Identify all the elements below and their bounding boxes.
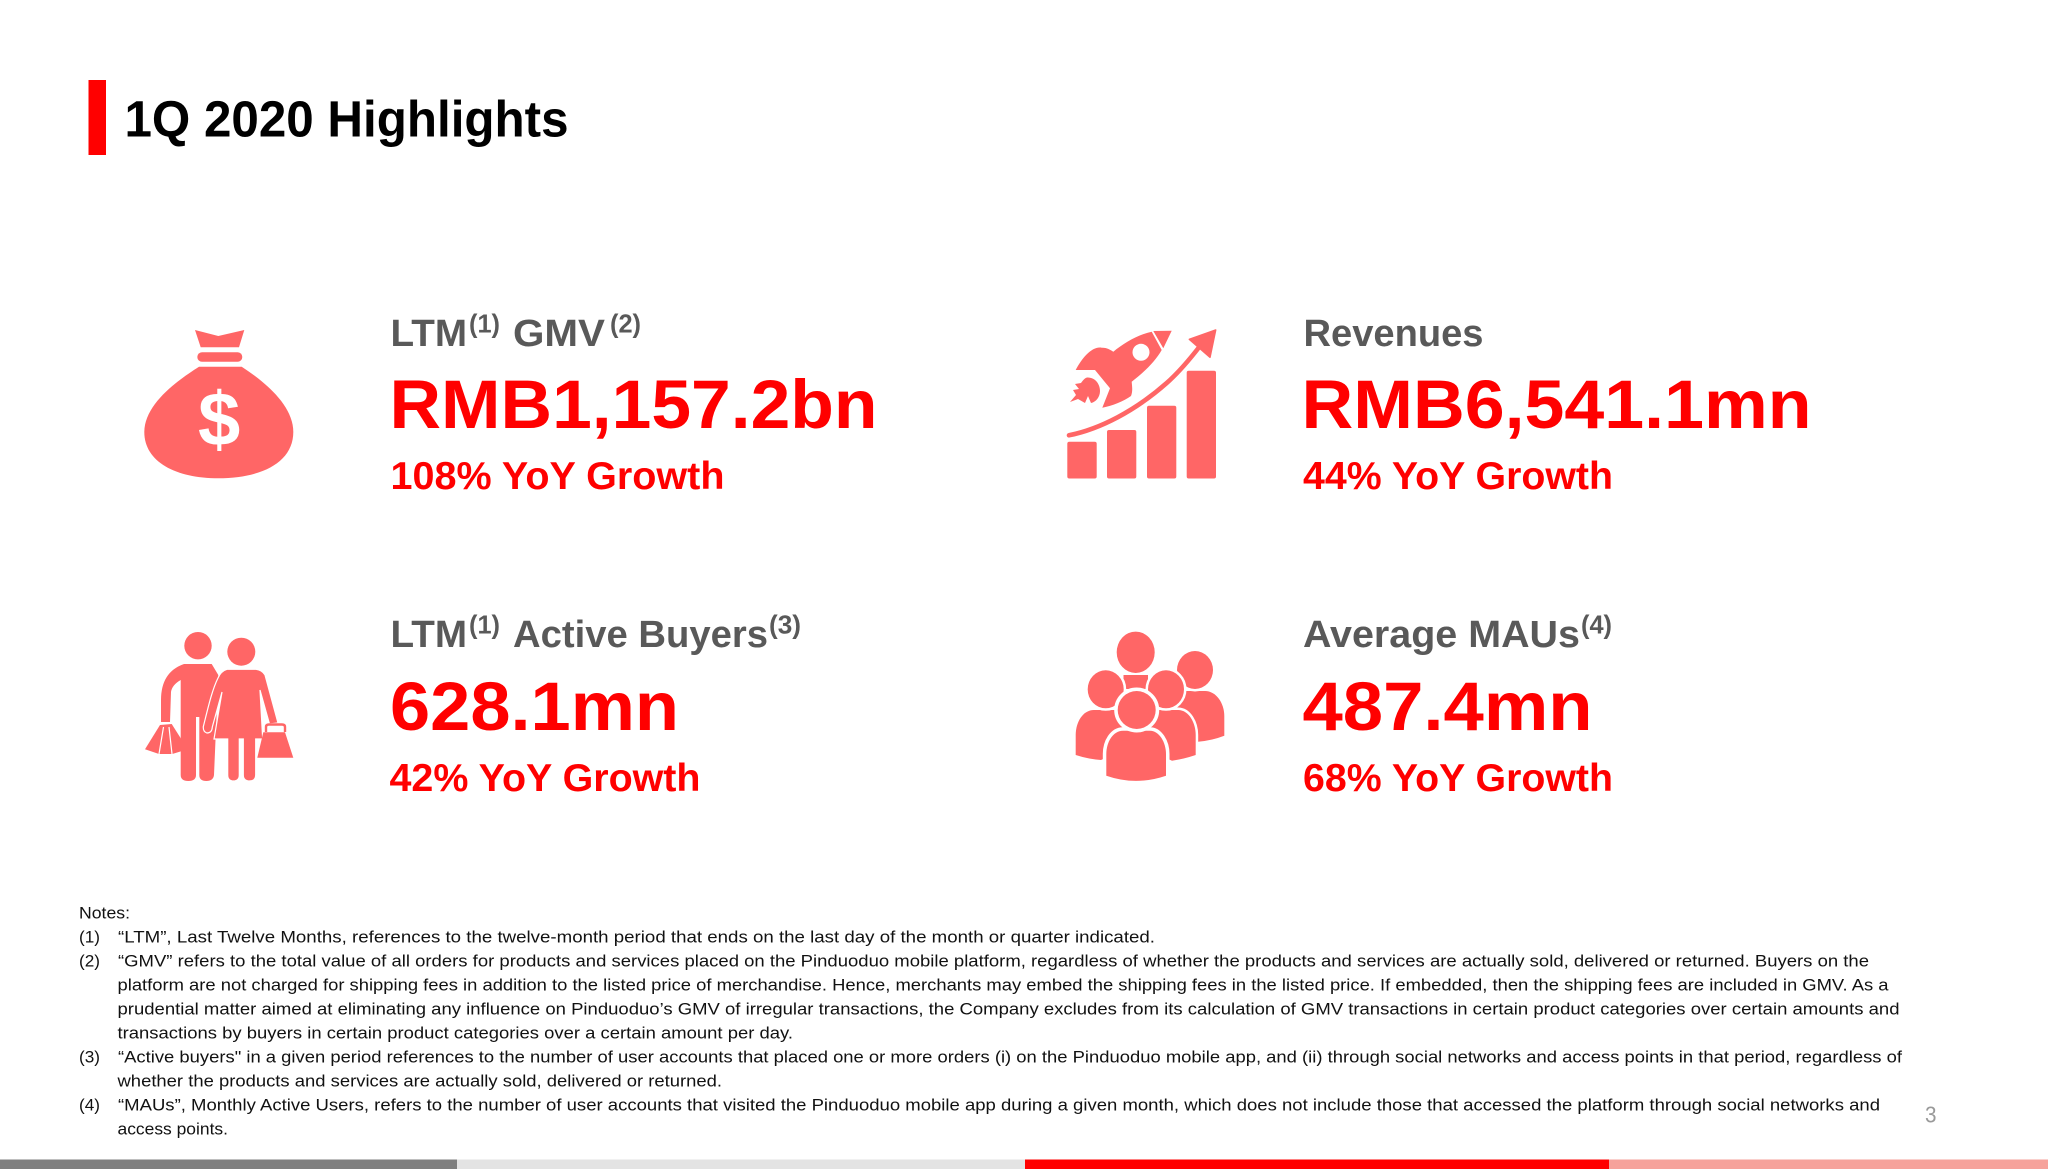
value: Revenues: RMB6,541.1mn [1302, 366, 1812, 443]
label: LTM GMV [390, 308, 641, 355]
notes block: platform are not charged for shipping fees in addition to the listed price of merchandise. Hence, merchants may embed the shipping fees in the listed price. If embedded, then the shipping fees are included in GMV. As a [118, 976, 1889, 994]
label: LTM GMV: LTM [390, 313, 467, 355]
notes block [79, 904, 1902, 1138]
notes block: access points. [118, 1120, 228, 1138]
notes block: “MAUs”, Monthly Active Users, refers to the number of user accounts that visited the Pinduoduo mobile app during a given month, which does not include those that accessed the platform through social networks and [118, 1096, 1880, 1114]
notes block: (3) [79, 1048, 100, 1066]
notes block: prudential matter aimed at eliminating any influence on Pinduoduo’s GMV of irregular transactions, the Company excludes from its calculation of GMV transactions in certain product categories over certain amounts and [118, 1000, 1900, 1018]
notes block: transactions by buyers in certain product categories over a certain amount per day. [118, 1024, 793, 1042]
value: GMV: RMB1,157.2bn [390, 366, 878, 443]
label: LTM Active Buyers: Active Buyers [513, 614, 768, 656]
title: 1Q 2020 Highlights [124, 90, 568, 148]
footer colour bar [0, 1160, 2048, 1169]
label: LTM GMV: (2) [610, 308, 641, 338]
panel: Average MAUs [1076, 610, 1613, 800]
label: LTM Active Buyers: (3) [769, 610, 801, 640]
label: Revenues: Revenues [1304, 313, 1484, 355]
growth: MAUs: 68% YoY Growth [1303, 757, 1613, 800]
label: LTM GMV: (1) [469, 308, 500, 338]
value: MAUs: 487.4mn [1302, 668, 1592, 745]
panel: LTM GMV [144, 308, 878, 498]
label: Average MAUs: Average MAUs [1303, 614, 1580, 656]
notes block: (2) [79, 952, 100, 970]
growth: Active Buyers: 42% YoY Growth [390, 757, 700, 800]
panel: LTM Active Buyers [145, 610, 801, 800]
notes block: whether the products and services are actually sold, delivered or returned. [116, 1072, 722, 1090]
panel: Revenues [1067, 313, 1812, 498]
label: Average MAUs: (4) [1581, 610, 1612, 640]
icon: shopping couple [145, 632, 293, 781]
icon: rocket and rising bars [1067, 330, 1216, 478]
notes block: “Active buyers" in a given period references to the number of user accounts that placed one or more orders (i) on the Pinduoduo mobile app, and (ii) through social networks and access points in that period, regardless of [118, 1048, 1902, 1066]
notes block: (1) [79, 928, 100, 946]
value: Active Buyers: 628.1mn [390, 668, 679, 745]
notes block: (4) [79, 1096, 100, 1114]
icon: money bag: $ [198, 378, 240, 463]
label: LTM GMV: GMV [513, 313, 606, 355]
page number: 3 [1925, 1102, 1936, 1128]
label: LTM Active Buyers: (1) [469, 610, 500, 640]
label: LTM Active Buyers: LTM [390, 614, 467, 656]
notes block: “LTM”, Last Twelve Months, references to the twelve-month period that ends on the last day of the month or quarter indicated. [118, 928, 1155, 946]
icon: money bag [144, 330, 293, 478]
title accent bar [88, 80, 106, 155]
icon: group of people [1076, 632, 1224, 781]
notes block: “GMV” refers to the total value of all orders for products and services placed on the Pinduoduo mobile platform, regardless of whether the products and services are actually sold, delivered or returned. Buyers on the [118, 952, 1869, 970]
notes block: Notes: [79, 904, 130, 922]
growth: GMV: 108% YoY Growth [390, 455, 724, 498]
label: LTM Active Buyers [390, 610, 801, 656]
growth: Revenues: 44% YoY Growth [1303, 455, 1613, 498]
